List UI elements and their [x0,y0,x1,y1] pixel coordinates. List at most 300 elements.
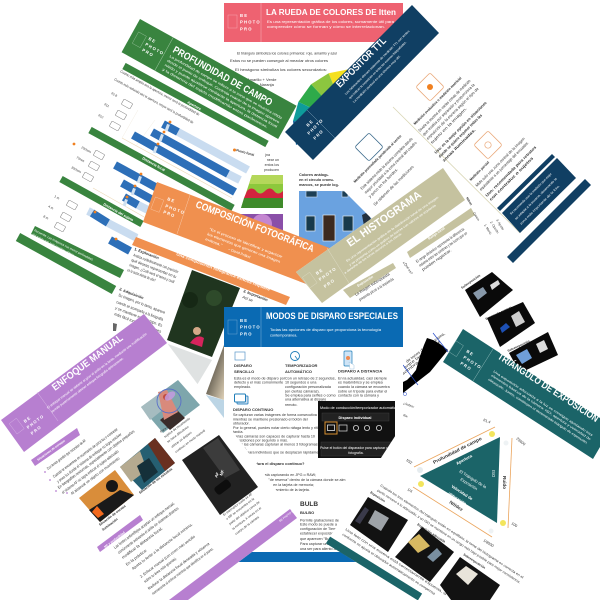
text block: nikon: 1. Menú [483,223,493,235]
icon: temporizador [290,352,300,360]
chart: apertura: f/2.8 [111,91,118,98]
text block: disparo continuo: obturador. [233,422,250,426]
scale: apertura: f/1.4 [483,418,491,424]
text block: exposición: ¿Qué es? [402,260,413,275]
header: expositor TTL: PHOTO [306,117,324,136]
text block: importación: 3. Importación [243,289,269,302]
text block: situaciones de enfoque: el sistema AF no logra enfocar el sujeto adecuado [61,448,120,495]
callout: nota en verde [32,228,122,274]
caption: selector: parte del objetivo cerca de [228,500,261,526]
tag: situaciones: Situaciones de enfoque [36,439,66,462]
callout: nota en verde: del sujeto son más precisas al foco. [32,232,76,258]
text block: rango tonal [415,226,469,272]
steps: pasos: Ajusta tu lente a la distancia focal mínima. [131,522,193,571]
text block: situaciones de enfoque: Al alcanzar un objeto con movimiento [70,455,121,496]
text block: disparo sencillo: DISPARO [234,363,252,368]
text block: nikon: 2. Opción [489,220,500,234]
text block: introducción: punto cercano a lo adecuado, y un ISO se mantiene en un rango más bajo posible para mejor consistencia. [376,488,521,584]
text block: situaciones de enfoque: Con temas grandes que necesitan de AF [46,438,87,471]
section bar: distancia del sujeto: Distancia del sujeto [103,202,135,223]
scale: ruido [500,437,526,528]
caption: foto 1: sujetos de movimiento [163,416,191,439]
text block: técnica: modificar la distancia focal. [121,526,164,560]
heading: bulb: BULB [300,501,318,508]
callout: consejo: Se recomienda usar la medición que mejor [509,172,553,216]
text block: exploración: imagen. ¿Cuál será el tema y cuál [129,262,175,284]
text block: simbolismo de triángulo y hexágono: El triángulo simboliza los colores primarios: rojo, amarillo y azul [237,50,337,56]
text block: cuánto dura: Depende de si se está capturando en JPG o RAW; [233,473,316,477]
small dark photo fragment [113,323,117,331]
header: composición fotográfica: – David Präkel [228,247,251,259]
text block: medición parcial: equivalente a un porcentaje del encuadre. [478,140,530,192]
text block: colores análogos [299,173,346,187]
chart: distancia del sujeto: 4 m [48,204,54,211]
caption: selector: la montura. A veces en el [231,506,262,531]
chart: distancia focal: 70mm [76,155,86,163]
footer bar [224,552,364,562]
header: composición fotográfica: PRO [163,209,176,218]
steps: pasos: Reducir la distancia focal deseada y observa [147,541,211,591]
text block: cuánto dura: antes de que se escriba en la tarjeta de memoria; [233,483,314,487]
text block: disparo continuo [233,407,324,454]
text block: conclusión: Una foto con una escena está correctamente expuesta, si [344,527,448,596]
text block: rango tonal: El rango dinámico representa la diferencia [415,226,466,264]
text block: rango tonal: máxima entre las sombras y las luces que se [418,230,469,268]
text block: medición evaluativa: Divide la escena en varias zonas de medición [417,78,472,133]
header: composición fotográfica: BE [167,196,176,204]
header: triángulo de exposición [443,329,600,459]
text block: cuánto dura: y la velocidad de almacenamiento de la tarjeta. [233,488,310,492]
text block: medición ponderada: mayor prioridad a la zona central del cuadro [363,140,418,195]
header: rueda de colores: LA RUEDA DE COLORES DE Itten [266,7,396,17]
text block: exposición: entre las zonas de [403,338,442,370]
panel: el histograma [296,168,558,420]
header: triángulo de exposición: Una exposición adecuada a la luz se consigue ajustando tres [492,369,594,437]
section bar: etapas: Una composición fotográfica exitosa requiere [176,252,271,292]
text block: temporizador automático: configuración personalizada [285,385,332,389]
scale: apertura: f/32 [405,458,413,465]
section bar: distancia del sujeto [61,179,142,224]
screen: modo de conducción: fotografía. [348,451,364,455]
header: enfoque manual: BE [23,415,32,424]
callout: consejo: se adapte a la escena, observando la [514,177,558,221]
text block: simbolismo de triángulo y hexágono [230,50,337,87]
screen: modo de conducción [318,401,398,458]
text block: adquisición: 2. Adquisición [119,287,145,300]
photo: tulipanes [241,175,283,208]
text block: cuánto dura: ¿Cuánto dura el disparo continuo? [238,461,305,466]
text block: disparo a distancia: sobre un trípode para evitar el [338,390,387,394]
chart: triángulo: El Triángulo de la [458,469,488,490]
page [224,307,403,562]
header: enfoque manual [1,314,167,452]
caption: situación de escasa iluminación: Situación de escasa [98,504,127,527]
caption: foto 1: se hace dificultoso [166,425,190,444]
caption: situación de escasa iluminación: iluminación [101,517,119,532]
screen: sobreexposición [440,557,500,600]
panel: profundidad de campo [18,19,297,290]
text block: temporizador automático: 10 segundos o una [285,380,317,384]
header: rueda de colores: PHOTO [240,20,261,24]
text block: medición ponderada: Se obtienen de las mediciones [372,164,415,207]
text block: técnica: Las lentes antirreflejos aceptan un enfoque manual, [113,501,175,550]
chart: triángulo [420,437,500,523]
scale: apertura: Profundidad de campo [432,436,483,465]
panel: rueda de colores de Itten [224,3,403,290]
text block: colores análogos: marcos, se puede lograr... [299,183,346,187]
chart: triángulo: Nitidez [448,500,464,512]
divider line [393,107,520,233]
screen: subexposición [465,272,513,317]
photo: selector AF / MF: MF [218,469,225,476]
header: modos de disparo: contemporánea. [270,334,297,338]
tag: MF [97,515,143,552]
text block: disparo a distancia: DISPARO A DISTANCIA [338,368,382,374]
text block: medición ponderada [353,134,418,207]
caption: selector: cuerpo de la cámara [234,515,260,536]
chart: triángulo: Apertura [455,453,473,466]
text block: adquisición: y se mantiene en el tiempo. Es [115,305,163,328]
caption: selector [222,492,262,536]
text block: técnica: comúnmente activando el anillo sin sistemas distintos [117,506,179,555]
header: composición fotográfica: los elementos que generan una imagen [207,232,281,264]
text block: medición evaluativa: que evalúa por separado y proporciona la [421,82,476,137]
header: rueda de colores: Es una representación gráfica de los colores, sumamente útil para [267,20,394,24]
text block: exploración: Analiza cuidadosamente con precisión [133,252,179,274]
page [326,362,600,600]
scale: ruido: 25600 [515,437,526,447]
text block: medición ponderada: Medición promediada ponderada al centro [353,134,403,184]
header: triángulo de exposición: BE [465,349,475,357]
text block: medición evaluativa: zonas iluminadas. [441,127,477,163]
header: el histograma: Es una representación gráfica de la distribución tonal de una imagen [345,195,440,263]
text block: disparo continuo: Se capturan varias imágenes de forma consecutiva [233,413,318,417]
steps: pasos: nuevamente al enfocar mientras que identifica en el punto. [151,547,214,596]
text block: temporizador automático: Se emplea para selfies o como [285,394,336,398]
header: profundidad de campo: desde el punto de enfoque. Controla cuánto de la imagen aparece [166,59,280,124]
text block: disparo continuo: Por lo general, puedes notar cierto ráfaga lento y rítlago [233,426,324,430]
footer bar: BE PHOTO PRO [278,506,298,523]
label: sobreexposición: Sobreexposición [462,552,486,570]
text block: introducción: Cuando los tres elementos del triángulo están en equilibrio, la toma del histograma es correcta en el [379,483,524,580]
text block: medición parcial: Medición parcial [469,160,490,182]
icon: medición puntual [416,73,444,101]
text block: simbolismo de triángulo y hexágono: Rojo + Naranja [247,82,275,87]
header: composición fotográfica: "Es el proceso de identificar y organizar [209,227,284,259]
text block: colores análogos: Colores análogos, [299,173,332,177]
header: profundidad de campo: PHOTO [144,42,165,56]
page [100,222,330,405]
header: modos de disparo [224,307,403,347]
scale: obturador: 1/4 [406,487,413,494]
text block: bulbo: Este modo se puede a [300,522,338,526]
text block: importación: Así se [242,294,255,303]
panel: composición fotográfica [100,182,345,418]
text block: disparo sencillo: defecto y el más comúnmente [234,380,283,384]
page [1,314,297,600]
screen: modo de conducción: Modo de conducción/temporizador automático [320,406,398,410]
header: triángulo de exposición: elementos básicos de la cámara: ISO, apertura y velocidad de [490,373,592,441]
text block: disparo continuo: DISPARO CONTINUO [233,407,273,412]
callout: consejo: zona más importante de la foto. [519,184,561,226]
header: expositor TTL: BE [305,118,315,128]
text block: colores cálidos: near un [267,158,279,162]
text block: temporizador automático: AUTOMÁTICO [285,369,312,374]
header: expositor TTL [285,5,439,160]
chart: distancia focal: 200mm [81,145,92,154]
header: modos de disparo: Todas las opciones de disparo que proporciona la tecnología [270,328,382,332]
text block: medición ponderada: Este sistema mide la escena completa dando [359,136,414,191]
text block: medición parcial: Mide solo una zona central de la imagen [474,136,526,188]
chart: triángulo: obturación [447,491,468,506]
screen: modo de conducción: Disparo individual [339,416,371,420]
panel: modos de disparo especiales [224,307,403,562]
chart: distancia focal: 300mm [71,165,82,174]
caption: foto 1: Para capturar a los [159,414,183,434]
scale: ruido: 100 [510,521,518,528]
text block: disparo continuo: tardía. [233,430,243,434]
text block: situaciones de enfoque: Cuando te encuentras en escenarios de poca luz o contraste [52,426,119,479]
text block: cuánto dura [233,461,346,492]
scale: apertura [405,418,495,473]
header: profundidad de campo: nítido y puede ajustarse mediante la apertura, la distancia focal [164,63,278,129]
icon: medición parcial [474,131,502,159]
text block: adquisición: cuando se acompaña a la fotografía [116,299,165,322]
text block: bulbo: que aparecen "Bulb" [300,537,334,541]
header: enfoque manual: El enfoque manual se obtiene al girar el anillo en la lente, mediante una modificación [46,332,148,410]
screen: sobreexposición [509,332,558,373]
caption: situación de los estudios: Situación de los estudios [138,467,173,495]
text block: conclusión [341,527,448,596]
header: composición fotográfica: exitosa." [205,237,224,248]
text block: exploración: es la razón detrás de ello? [127,267,157,283]
header: expositor TTL: Los fabricantes ofrecen sistemas de medición TTL con lentes [344,29,411,96]
text block: situaciones de enfoque: En fotografías nocturnas, especialmente con objetos pequeños [57,429,135,490]
header: el histograma: PRO [323,277,336,289]
text block: simbolismo de triángulo y hexágono: Amarillo + Verde [247,77,277,82]
section bar: exposición: Exposición [356,275,374,288]
text block: disparo continuo: por rato. [233,446,247,450]
photo: selector AF / MF: AF [213,471,220,478]
text block: disparo a distancia: En la actualidad, casi siempre [338,376,387,380]
text block: disparo continuo: Es ideal para individuos que se desplazan rápidamente. [233,450,324,454]
header: triángulo de exposición: obturación. Juntos, constituyen el denominado triángulo de exposición. [487,377,589,445]
section bar: exposición [343,263,396,298]
section bar: apertura [124,66,267,144]
text block: nikon: Nikon [465,196,473,206]
text block: colores cálidos [264,153,279,172]
caption: foto 1 [159,414,206,454]
text block: bulbo [300,510,341,551]
chart: triángulo: Velocidad de [450,484,474,502]
header: modos de disparo: BE [240,318,248,323]
text block: disparo a distancia [338,368,391,398]
text block: temporizador automático [285,363,336,407]
steps: pasos: 2. Enfocar manual (con zoom más sencillo [139,535,196,579]
text block: situaciones de enfoque [44,426,135,496]
label: exposición: Exposición [369,490,386,503]
header: rueda de colores: BE [240,13,248,18]
header: triángulo de exposición: PHOTO [462,355,483,370]
legend: punto focal: Punto focal [236,148,255,157]
text block: adquisición [114,287,167,334]
header: el histograma: EL HISTOGRAMA [345,189,424,249]
text block: rango tonal: pueden registrar. [421,248,452,272]
header: triángulo de exposición: PRO [459,361,473,372]
chart: triángulo: ISO [491,470,496,478]
header: expositor TTL: La medición puntual es una técnica muy útil. [352,54,401,104]
header: profundidad de campo [122,19,297,139]
header: expositor TTL: que indican la exposición en todas las escenas fotografiadas. [348,40,407,100]
text block: disparo sencillo: SENCILLO [234,369,254,374]
text block: colores análogos: en el círculo cromático, [299,178,341,182]
header: el histograma: PHOTO [318,266,338,282]
chart: apertura: f/11 [104,102,110,108]
text block: apertura: Cuanto más reducida sea la apertura, mayor será la profundidad de [114,77,194,125]
page [313,33,591,312]
photo: tonos claros [168,344,212,385]
text block: situaciones de enfoque: y poca luz donde el sistema de enfoque no logra resolver [56,431,123,484]
screen: modo de conducción: Pulse el botón del disparador para capturar una [320,446,392,450]
page [296,168,540,420]
text block: temporizador automático: Con un retraso de 2 segundos, [285,376,336,380]
text block: exposición: La imagen subexpuesta [354,271,391,297]
header: composición fotográfica: PHOTO [165,203,186,215]
text block: medición evaluativa: Uso: es la mejor opción en situaciones [433,100,488,155]
header: composición fotográfica: COMPOSICIÓN FOTOGRÁFICA [194,198,316,255]
label: exposición adecuada: Exposición adecuada [416,522,446,544]
text block: apertura: Cuanto más amplia sea la apertura, menor será la profundidad de [120,69,200,117]
photo: persona con objetivo circular [141,380,200,433]
panel: enfoque manual [1,314,298,600]
header: profundidad de campo: PRO [141,47,155,58]
photo: flores violetas [238,214,283,244]
text block: adquisición: Su imagen, por lo tanto, aparece [118,292,167,315]
photo: edificio azul [299,191,375,290]
header: profundidad de campo: PROFUNDIDAD DE CAMPO [171,45,274,109]
text block: exploración: 1. Exploración [134,247,160,260]
text block: bulbo: una ser para aliento a la [300,547,341,551]
section bar: etapas [132,237,290,305]
panel: triángulo de exposición [326,329,600,600]
text block: disparo continuo: exposiciones por segundo o más. [233,438,288,442]
photo: cielo [206,395,224,418]
header: rueda de colores [224,3,403,42]
chart: apertura [98,91,248,198]
text block: nikon [465,196,505,235]
tag: MF: MF y profundidad [103,530,126,549]
header: modos de disparo: PRO [240,332,253,336]
photo: selector AF / MF [182,435,258,515]
icon: disparo sencillo [235,352,245,360]
text block: medición parcial: Uso: recomendada para retratos [484,144,538,198]
text block: medición evaluativa: donde se quiere exponer todas las [437,112,484,159]
text block: medición ponderada: y poco en los bordes. [367,167,399,199]
text block: colores cálidos: producen [264,168,279,172]
text block: exposición [354,260,446,376]
tag: situaciones [31,428,80,466]
text block: disparo continuo: Todas las cámaras capturan al menos 3 fotogramas [233,442,318,446]
header: rueda de colores: PRO [240,26,253,32]
text block: medición evaluativa: exposición de la escena según el tipo de [425,86,480,141]
text block: disparo continuo: Varias cámaras son capaces de capturar hasta 10 [233,434,315,438]
text block: medición parcial [469,136,538,202]
header: el histograma [296,168,465,303]
header: composición fotográfica [143,182,345,293]
chart: distancia del sujeto: 1 m [54,194,60,201]
icon: medición ponderada [355,133,383,161]
text block: disparo continuo: mientras se mantiene presionado el botón del [233,418,308,422]
caption: selector: o MF se encuentra en la [225,497,255,521]
footer bar [328,540,420,597]
text block: medición parcial: con contraluz o sujetos [488,155,535,202]
panel: expositor TTL [285,5,591,312]
text block: técnica [113,501,179,567]
steps: pasos [131,522,214,596]
footer bar [169,506,298,600]
header: modos de disparo: MODOS DE DISPARO ESPECIALES [266,311,398,322]
header: el histograma: y se presenta como un gráfico de barras con valores de izquierda [348,203,437,267]
header: rueda de colores: comprender cómo se forman y cómo se interrelacionan. [267,25,385,29]
header: expositor TTL: EXPOSITOR TTL [334,36,389,90]
label: exposición correcta: Exposición correcta [485,305,513,321]
icon: disparo continuo [234,394,248,404]
header: enfoque manual: ENFOQUE MANUAL [50,333,125,393]
text block: nikon: Canon [472,211,481,222]
text block: bulbo: BULBO [300,510,314,515]
text block: temporizador automático: (en ciertas cámaras). [285,390,320,394]
header: expositor TTL: PRO [312,128,325,141]
label: sobreexposición: Sobreexposición [507,339,530,353]
text block: disparo a distancia: es inalámbrico y se emplea [338,380,384,384]
text block: temporizador automático: TEMPORIZADOR [285,363,318,368]
icon: disparo a distancia [344,351,354,369]
caption: foto 1: utilizar un disparo [170,430,193,449]
text block: exposición: de tonos del histograma, [405,331,446,364]
text block: bulbo: establecer exposicion [300,532,335,536]
text block: conclusión: conforme se ajusta el obturador automáticamente se compensa [341,532,436,596]
text block: exposición: sombra y luz. [401,351,432,376]
screen: exposición adecuada [395,527,454,582]
text block: colores cálidos: entos los [265,163,279,167]
footer bar [507,179,591,263]
scale: ruido: Ruido [502,476,507,489]
text block: colores cálidos: jna [264,153,270,157]
text block: medición evaluativa: Medición evaluativa o medición matricial [413,76,462,126]
text block: simbolismo de triángulo y hexágono: Estos no se pueden conseguir al mezclar otros colores [230,58,328,63]
steps: pasos: sobre tu área más grande). [143,557,178,584]
section bar: apertura: Apertura [187,100,202,112]
scale: obturador: 1/8000 [482,538,494,548]
text block: bulbo: Permite grabaciones de [300,518,339,522]
chart: apertura: f/22 [98,113,104,120]
caption: selector: El interruptor suele se AF [222,492,253,517]
photo: atardecer [79,470,134,522]
section bar: distancia focal: Distancia focal [142,156,166,172]
text block: exploración: qué deseas representar en tu [131,257,177,279]
chart: rueda de color [293,69,350,145]
scale: obturador [406,481,494,548]
text block: simbolismo de triángulo y hexágono: El hexágono simboliza los colores secundarios: [235,67,327,72]
label: información: Subexposición [460,274,481,290]
chart: histograma [403,333,448,420]
header: enfoque manual: PRO [30,424,43,436]
text block: bulbo: configuración de Tiem [300,527,336,531]
chart: distancia focal [71,143,170,222]
chart: histograma: ¿Sobreex.. [403,401,419,410]
callout: nota en verde: Recuerda: Las imágenes con menor profundidad, [34,228,94,262]
text block: temporizador automático: remoto. [285,403,298,407]
